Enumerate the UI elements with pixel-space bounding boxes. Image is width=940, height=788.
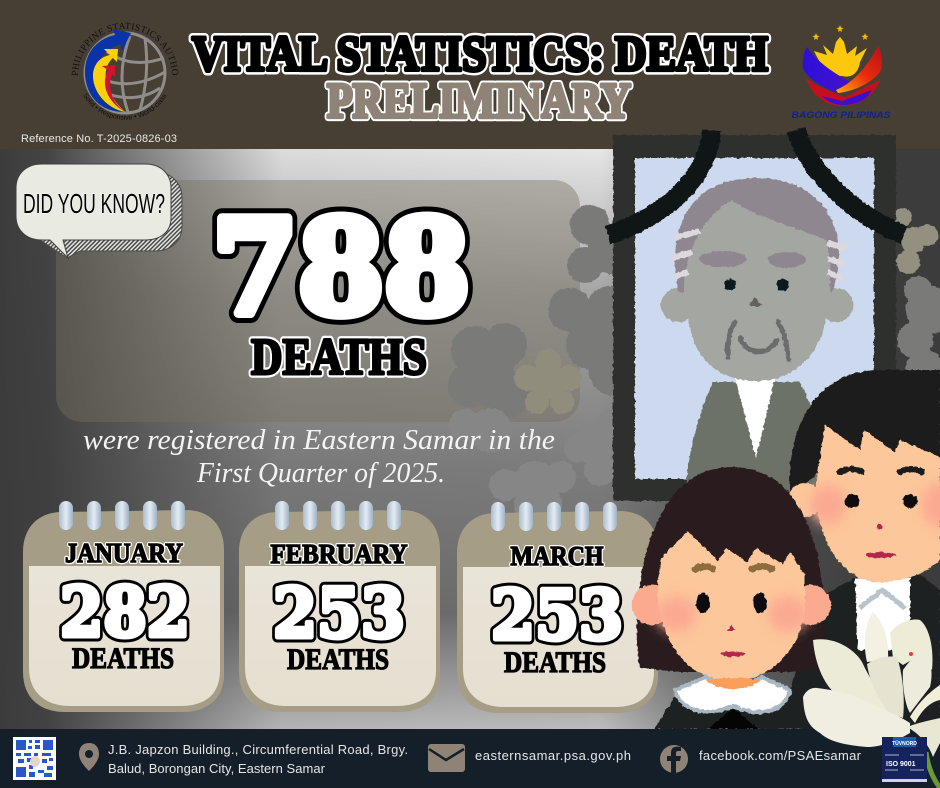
deaths label: DEATHS — [72, 642, 174, 675]
calendar body — [239, 510, 440, 712]
bubble hatched shadow — [27, 172, 182, 258]
total deaths number: 788 — [212, 191, 470, 344]
calendar page — [245, 566, 436, 706]
portrait backdrop — [635, 158, 874, 479]
girl collar — [675, 677, 790, 712]
calendar rings — [491, 502, 617, 531]
boy shirt — [855, 578, 910, 650]
header band — [0, 0, 940, 149]
portrait mouth and moustache — [728, 322, 789, 360]
boy suit — [780, 575, 940, 729]
registered caption: First Quarter of 2025. — [196, 457, 445, 489]
calendar: March — [457, 502, 658, 713]
ISO 9001 badge — [882, 737, 927, 782]
logo lower bands — [806, 78, 880, 106]
death count: 253 — [491, 576, 623, 656]
background gradient — [0, 149, 940, 729]
registered caption — [83, 424, 555, 489]
title: VITAL STATISTICS: DEATH — [192, 25, 768, 81]
calendar: February — [239, 501, 440, 712]
title: VITAL STATISTICS: DEATH — [192, 25, 768, 81]
logo blue band — [803, 47, 855, 93]
calendar: January — [23, 501, 224, 712]
boy cheeks — [810, 485, 846, 525]
portrait hair — [675, 178, 839, 292]
death count: 253 — [273, 574, 405, 654]
total deaths number: 788 — [212, 191, 470, 344]
boy face — [816, 425, 940, 582]
illustration: girl in black dress — [632, 467, 831, 729]
portrait suit — [684, 382, 826, 501]
calendar: February: FEBRUARY — [270, 539, 408, 569]
logo globe — [85, 33, 165, 113]
lily stem — [926, 752, 940, 788]
boy hair — [790, 370, 940, 500]
month label: JANUARY — [65, 538, 183, 568]
girl dress — [654, 672, 830, 729]
reference number: Reference No. T-2025-0826-03 — [21, 133, 177, 145]
deaths label: DEATHS — [287, 643, 389, 676]
lily petals — [865, 612, 888, 662]
address text — [108, 742, 408, 776]
logo: Philippine Statistics Authority: Solid • Responsive • World-class — [84, 93, 166, 120]
subtitle preliminary: PRELIMINARY — [327, 72, 631, 128]
subtitle preliminary: PRELIMINARY — [327, 72, 631, 128]
logo: Philippine Statistics Authority — [72, 22, 178, 120]
girl hair — [637, 467, 825, 672]
boy eyes — [845, 494, 917, 508]
address text: J.B. Japzon Building., Circumferential Road, Brgy. — [108, 742, 408, 757]
illustration: framed portrait of elderly man — [608, 130, 904, 501]
portrait nose — [749, 297, 762, 306]
illustration: boy in black suit — [780, 370, 940, 729]
portrait shirt — [735, 378, 775, 458]
death count: 253 — [491, 576, 623, 656]
calendar page — [29, 566, 220, 706]
logo: Bagong Pilipinas — [792, 25, 890, 120]
girl cheeks — [656, 596, 696, 632]
logo sun — [814, 37, 867, 77]
calendar body — [457, 511, 658, 713]
girl nose and mouth — [721, 625, 745, 656]
registered caption: were registered in Eastern Samar in the — [83, 424, 555, 456]
QR code — [13, 737, 56, 780]
calendar: March: MARCH — [510, 541, 604, 571]
calendar page — [463, 567, 654, 707]
icon: location pin — [79, 743, 99, 771]
girl eyes — [696, 593, 767, 613]
girl ears — [632, 585, 831, 625]
total deaths label: DEATHS — [251, 329, 427, 386]
mourning ribbon right — [796, 130, 904, 235]
boy nose and mouth — [866, 524, 896, 558]
month label: MARCH — [510, 541, 604, 571]
facebook text: facebook.com/PSAEsamar — [699, 748, 862, 763]
icon: facebook — [660, 745, 688, 773]
logo caption: BAGONG PILIPINAS — [792, 110, 890, 120]
calendar: January: JANUARY — [65, 538, 183, 568]
grey memorial flowers — [448, 205, 940, 529]
speech bubble: did you know — [16, 164, 182, 258]
logo arrows — [85, 29, 131, 112]
month label: FEBRUARY — [270, 539, 408, 569]
girl eyebrows — [695, 566, 772, 569]
deaths label: DEATHS — [504, 646, 606, 679]
boy eyebrows — [840, 469, 922, 472]
lily flowers — [803, 612, 940, 788]
bubble text: DID YOU KNOW? — [23, 188, 165, 219]
address text: Balud, Borongan City, Eastern Samar — [108, 761, 326, 776]
portrait eyes — [724, 279, 789, 291]
ISO 9001 badge: TÜVNORD — [892, 740, 917, 747]
portrait face — [684, 200, 830, 381]
hair stripes — [672, 231, 846, 279]
logo red band — [836, 46, 882, 93]
death count: 282 — [60, 573, 190, 653]
translucent panel behind total — [56, 180, 580, 422]
bubble body — [16, 164, 171, 258]
lily stamen — [909, 652, 913, 656]
death count: 253 — [273, 574, 405, 654]
logo stars — [812, 25, 868, 40]
calendar body — [23, 510, 224, 712]
footer band — [0, 729, 940, 788]
portrait frame — [613, 135, 896, 501]
total deaths label: DEATHS — [251, 329, 427, 386]
portrait ears — [661, 288, 853, 322]
girl face — [657, 531, 805, 681]
mourning ribbon left — [608, 130, 712, 235]
ISO 9001 badge: ISO 9001 — [886, 761, 916, 768]
portrait eyebrows — [699, 251, 806, 268]
calendar rings — [275, 501, 401, 530]
calendar rings — [59, 501, 185, 530]
icon: envelope — [428, 744, 465, 772]
boy ear — [788, 483, 822, 517]
website text: easternsamar.psa.gov.ph — [475, 748, 631, 763]
death count: 282 — [60, 573, 190, 653]
